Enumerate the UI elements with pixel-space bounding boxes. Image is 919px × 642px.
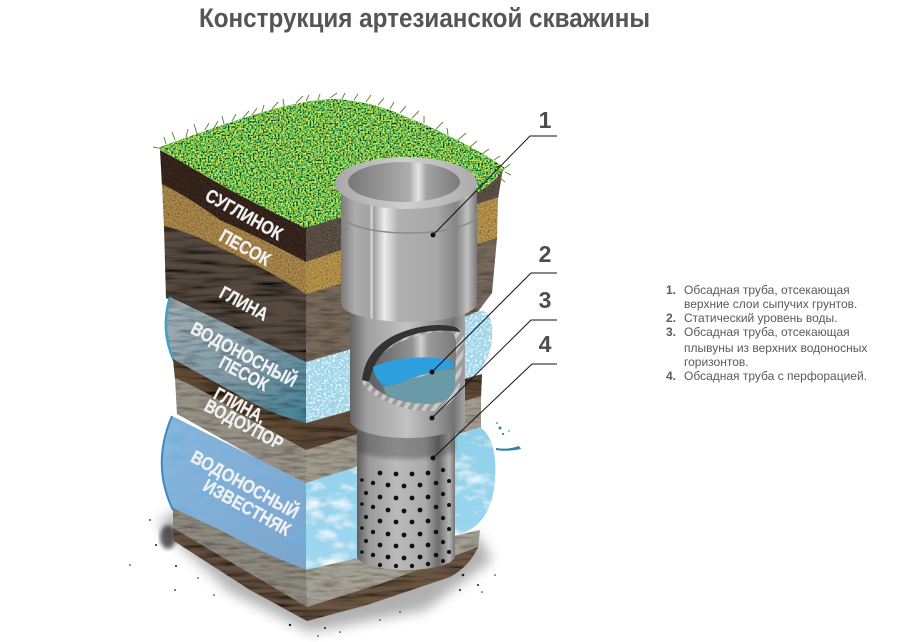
right face: aquifer xyxy=(306,311,492,426)
right face: bottom rock xyxy=(306,530,480,607)
legend: Обсадная труба с перфорацией. xyxy=(684,369,867,383)
static water level xyxy=(373,357,453,385)
title: Конструкция артезианской скважины xyxy=(199,3,650,33)
legend: 1. xyxy=(666,283,676,297)
label: loam: СУГЛИНОК xyxy=(202,185,287,244)
right face: brown clay xyxy=(306,374,482,452)
legend: горизонтов. xyxy=(684,355,749,369)
left face: aquifer edge xyxy=(166,297,174,361)
cutaway hatched rim xyxy=(362,325,464,411)
callout 4: 4 xyxy=(539,331,552,357)
left face: loam soil xyxy=(160,150,306,264)
left face: grey aquiclude xyxy=(175,378,306,486)
right face: limestone aquifer xyxy=(306,427,495,572)
pipe 4: perforated casing xyxy=(357,420,455,570)
left face: limestone aquifer xyxy=(161,416,306,572)
left face: brown clay band xyxy=(173,359,306,452)
soil block cross-section xyxy=(160,150,503,621)
left face: clay xyxy=(164,226,306,366)
left face: aquifer edge xyxy=(162,416,173,510)
callout 4 xyxy=(430,331,557,460)
left face: bottom rock xyxy=(173,508,307,610)
label: sand: ПЕСОК xyxy=(216,225,275,270)
layer labels xyxy=(187,185,303,540)
legend: Обсадная труба, отсекающая xyxy=(684,325,850,339)
legend: Обсадная труба, отсекающая xyxy=(684,283,850,297)
label: limestone: ИЗВЕСТНЯК xyxy=(200,475,295,540)
callout 2 xyxy=(430,241,557,374)
callout 1: 1 xyxy=(539,107,552,133)
label: aquifer: ВОДОНОСНЫЙ xyxy=(187,318,301,391)
right face: grey aquiclude xyxy=(306,396,481,485)
legend: Статический уровень воды. xyxy=(684,311,838,325)
right face: soil xyxy=(306,168,503,264)
right face: sand xyxy=(306,197,498,296)
left face: aquifer sand xyxy=(165,297,306,425)
cutaway dark inner wall xyxy=(362,325,461,382)
ground shadow xyxy=(158,510,492,632)
right face: clay xyxy=(306,238,497,366)
pipe 3: water-isolating casing with cutaway xyxy=(350,300,465,438)
right face: bottom brown layer xyxy=(307,547,478,621)
grass blades xyxy=(153,93,511,182)
label: water barrier: ВОДОУПОР xyxy=(201,395,287,454)
legend: плывуны из верхних водоносных xyxy=(684,341,867,355)
label: aquifer limestone: ВОДОНОСНЫЙ xyxy=(188,446,303,523)
pipe assembly xyxy=(335,157,477,570)
callout 3 xyxy=(430,287,557,420)
legend xyxy=(666,283,867,383)
label: clay aquiclude: ГЛИНА, xyxy=(210,383,270,428)
perforation holes xyxy=(360,468,451,568)
legend: верхние слои сыпучих грунтов. xyxy=(684,297,857,311)
callout 3: 3 xyxy=(539,287,551,313)
callout 1 xyxy=(430,107,557,238)
pipe rim xyxy=(335,157,477,209)
pipe interior xyxy=(369,331,456,404)
water below surface xyxy=(383,369,455,404)
left face: sand xyxy=(162,184,306,296)
pipe 1: upper casing xyxy=(335,157,477,322)
grass top xyxy=(153,93,511,228)
label: clay: ГЛИНА xyxy=(216,282,272,325)
label: sand aquifer: ПЕСОК xyxy=(216,352,273,395)
legend: 2. xyxy=(666,311,676,325)
legend: 4. xyxy=(666,369,676,383)
legend: 3. xyxy=(666,325,676,339)
icon: water splash xyxy=(496,422,521,451)
left face: bottom brown layer xyxy=(173,528,307,621)
callout 2: 2 xyxy=(539,241,551,267)
scattered soil specks xyxy=(129,519,496,637)
